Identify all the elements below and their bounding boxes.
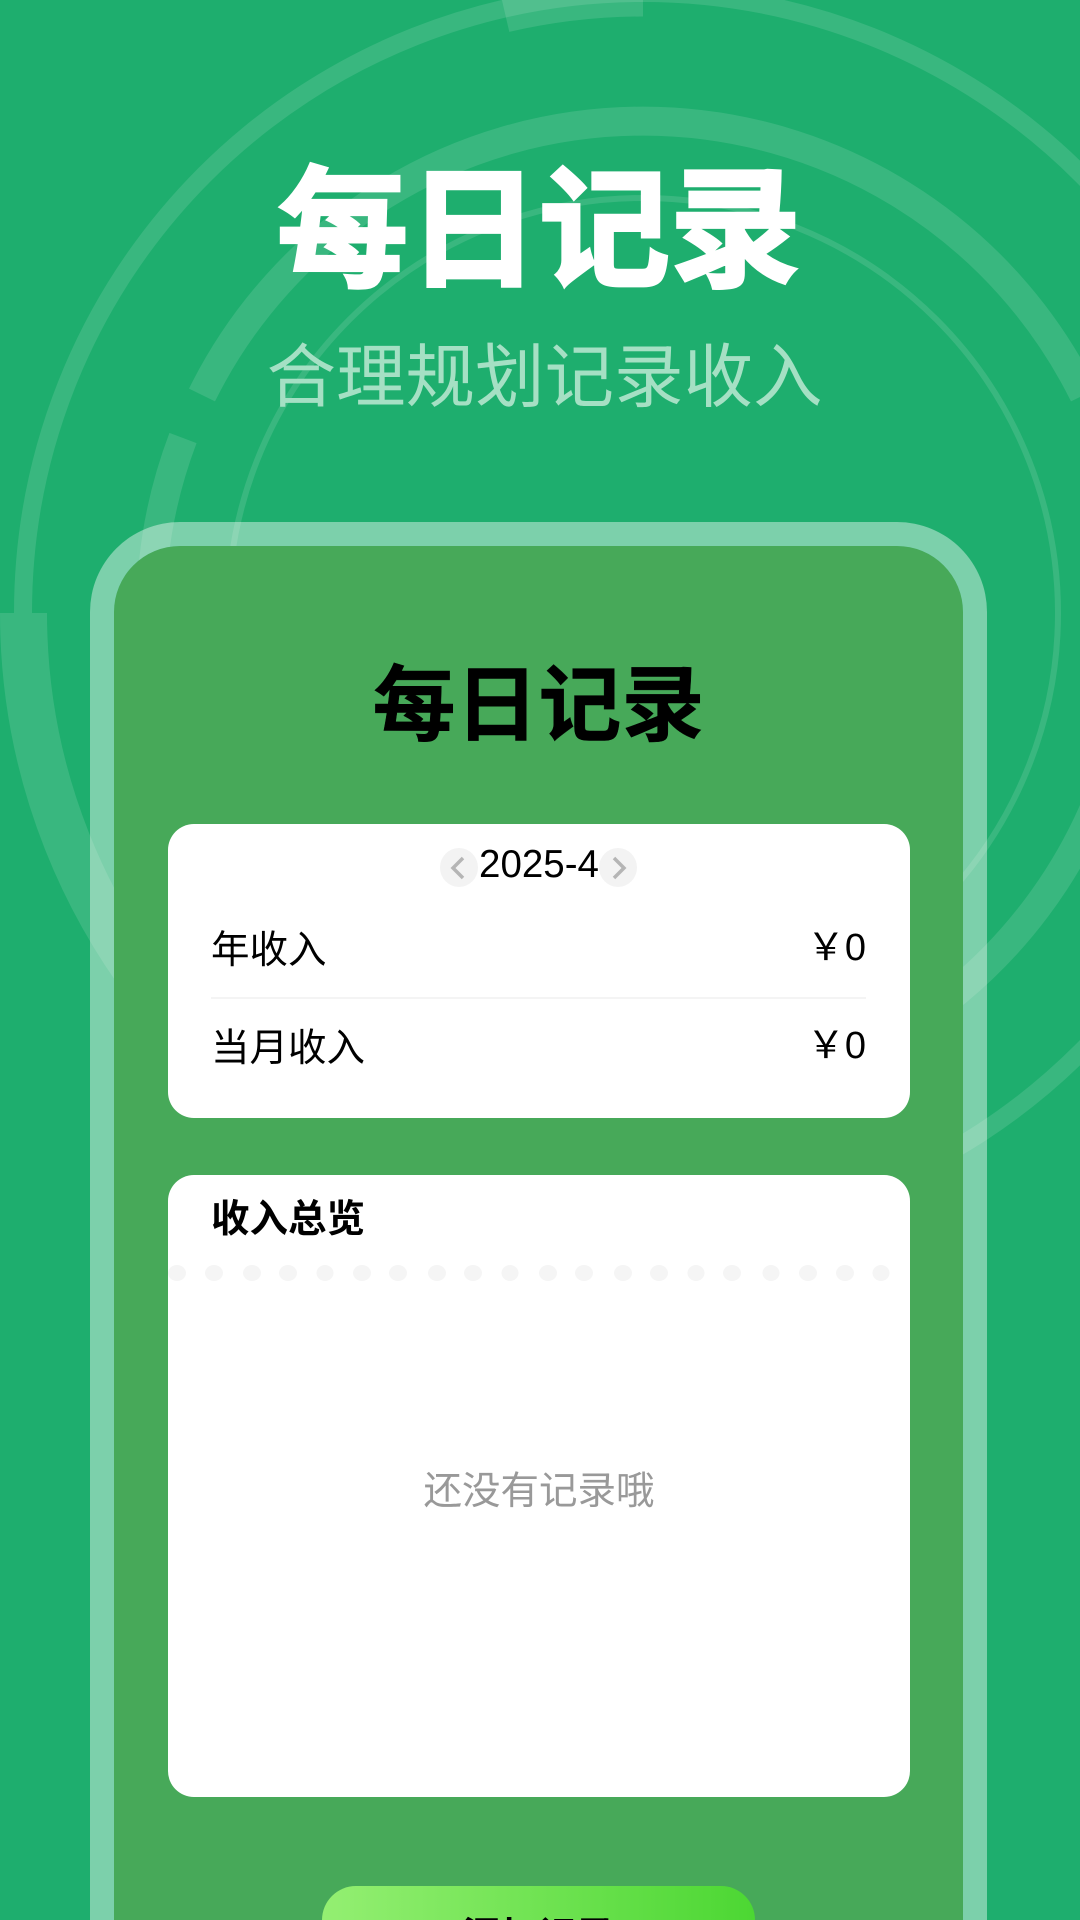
date: 2025-4 [479, 843, 599, 886]
subtitle: 合理规划记录收入 [266, 338, 822, 416]
value: yearly income: ￥0 [807, 927, 866, 969]
title: 每日记录 [277, 157, 801, 304]
overview heading: 收入总览 [211, 1198, 365, 1241]
previous month button [440, 848, 478, 887]
label: monthly income: 当月收入 [211, 1027, 365, 1070]
phone heading: 每日记录 [372, 659, 704, 752]
label: yearly income: 年收入 [211, 929, 327, 972]
dotted divider [168, 1265, 890, 1281]
panel: income overview [168, 1175, 910, 1797]
add record button [322, 1886, 755, 1920]
panel: income summary [168, 824, 910, 1118]
next month button [599, 848, 637, 887]
row divider [211, 997, 866, 999]
phone mockup [90, 522, 987, 1920]
empty state message: 还没有记录哦 [423, 1470, 654, 1513]
value: monthly income: ￥0 [807, 1025, 866, 1067]
